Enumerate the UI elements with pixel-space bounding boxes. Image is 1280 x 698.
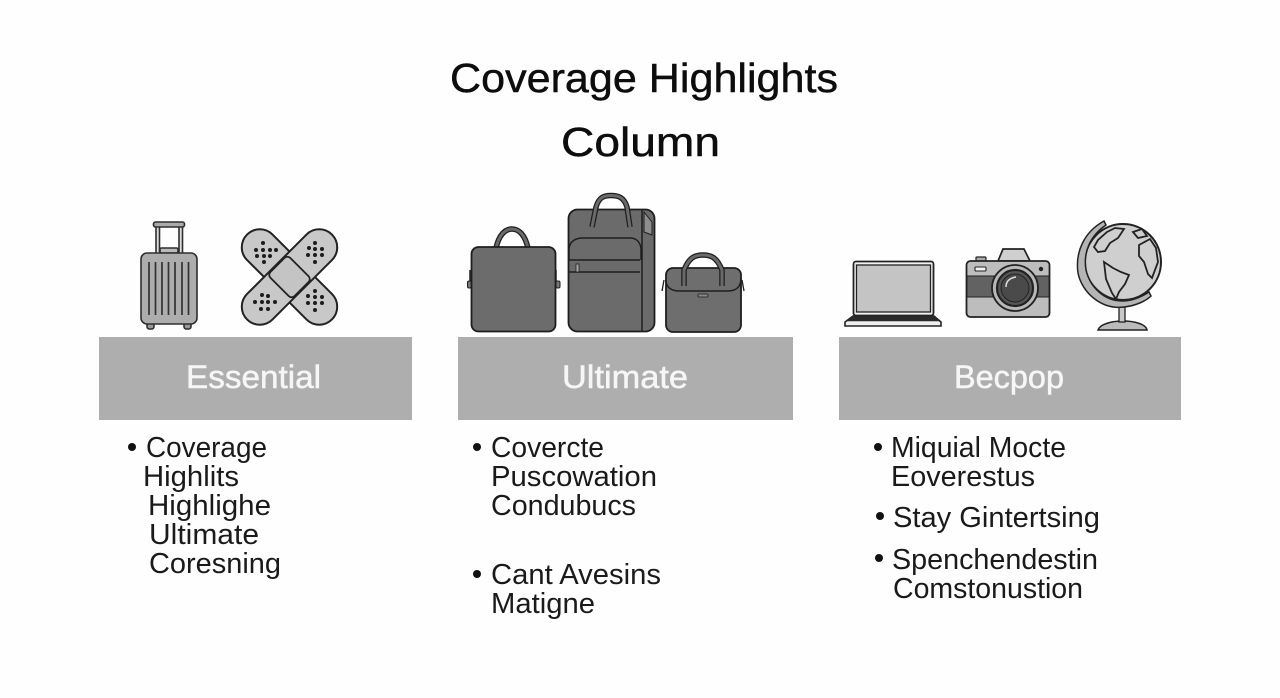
title (450, 55, 838, 165)
text block: Becpop list (874, 432, 1100, 605)
icon: crossed bandages (234, 222, 345, 332)
icon: upright backpack (568, 196, 654, 332)
text block: Essential list: Coresning (149, 548, 281, 580)
text block: Becpop list: Miquial Mocte (891, 432, 1066, 464)
text block: Ultimate list: Puscowation (491, 461, 657, 493)
text block: Ultimate list: Matigne (491, 588, 595, 620)
text block: Becpop list: Spenchendestin (892, 544, 1098, 576)
icon: suitcase (141, 222, 197, 329)
title: Coverage Highlights (450, 55, 838, 101)
map: continents (1094, 228, 1158, 299)
panel: Becpop: Becpop (954, 359, 1064, 395)
panel: Becpop (839, 337, 1181, 420)
text block: Ultimate list: Condubucs (491, 490, 636, 522)
panel: Ultimate: Ultimate (562, 359, 688, 395)
text block: Ultimate list: Cant Avesins (491, 559, 661, 591)
text block: Becpop list: Eoverestus (891, 461, 1035, 493)
title: Column (561, 119, 720, 165)
panel: Ultimate (458, 337, 793, 420)
icon: laptop (845, 262, 941, 326)
text block: Ultimate list: Covercte (491, 432, 604, 464)
text block: Becpop list: Comstonustion (893, 573, 1083, 605)
text block: Becpop list: Stay Gintertsing (893, 502, 1100, 534)
icon: camera (966, 249, 1050, 317)
text block: Essential list: Ultimate (149, 519, 259, 551)
icon: briefcase (662, 255, 744, 332)
text block: Essential list: Highlighe (148, 490, 271, 522)
panel: Essential: Essential (186, 359, 321, 395)
text block: Essential list: Coverage (146, 432, 267, 464)
text block: Ultimate list (473, 432, 661, 620)
icon: globe (1077, 221, 1161, 330)
icon: square laptop sleeve (468, 229, 560, 332)
text block: Essential list: Highlits (143, 461, 239, 493)
panel: Essential (99, 337, 412, 420)
text block: Essential list (128, 432, 281, 580)
